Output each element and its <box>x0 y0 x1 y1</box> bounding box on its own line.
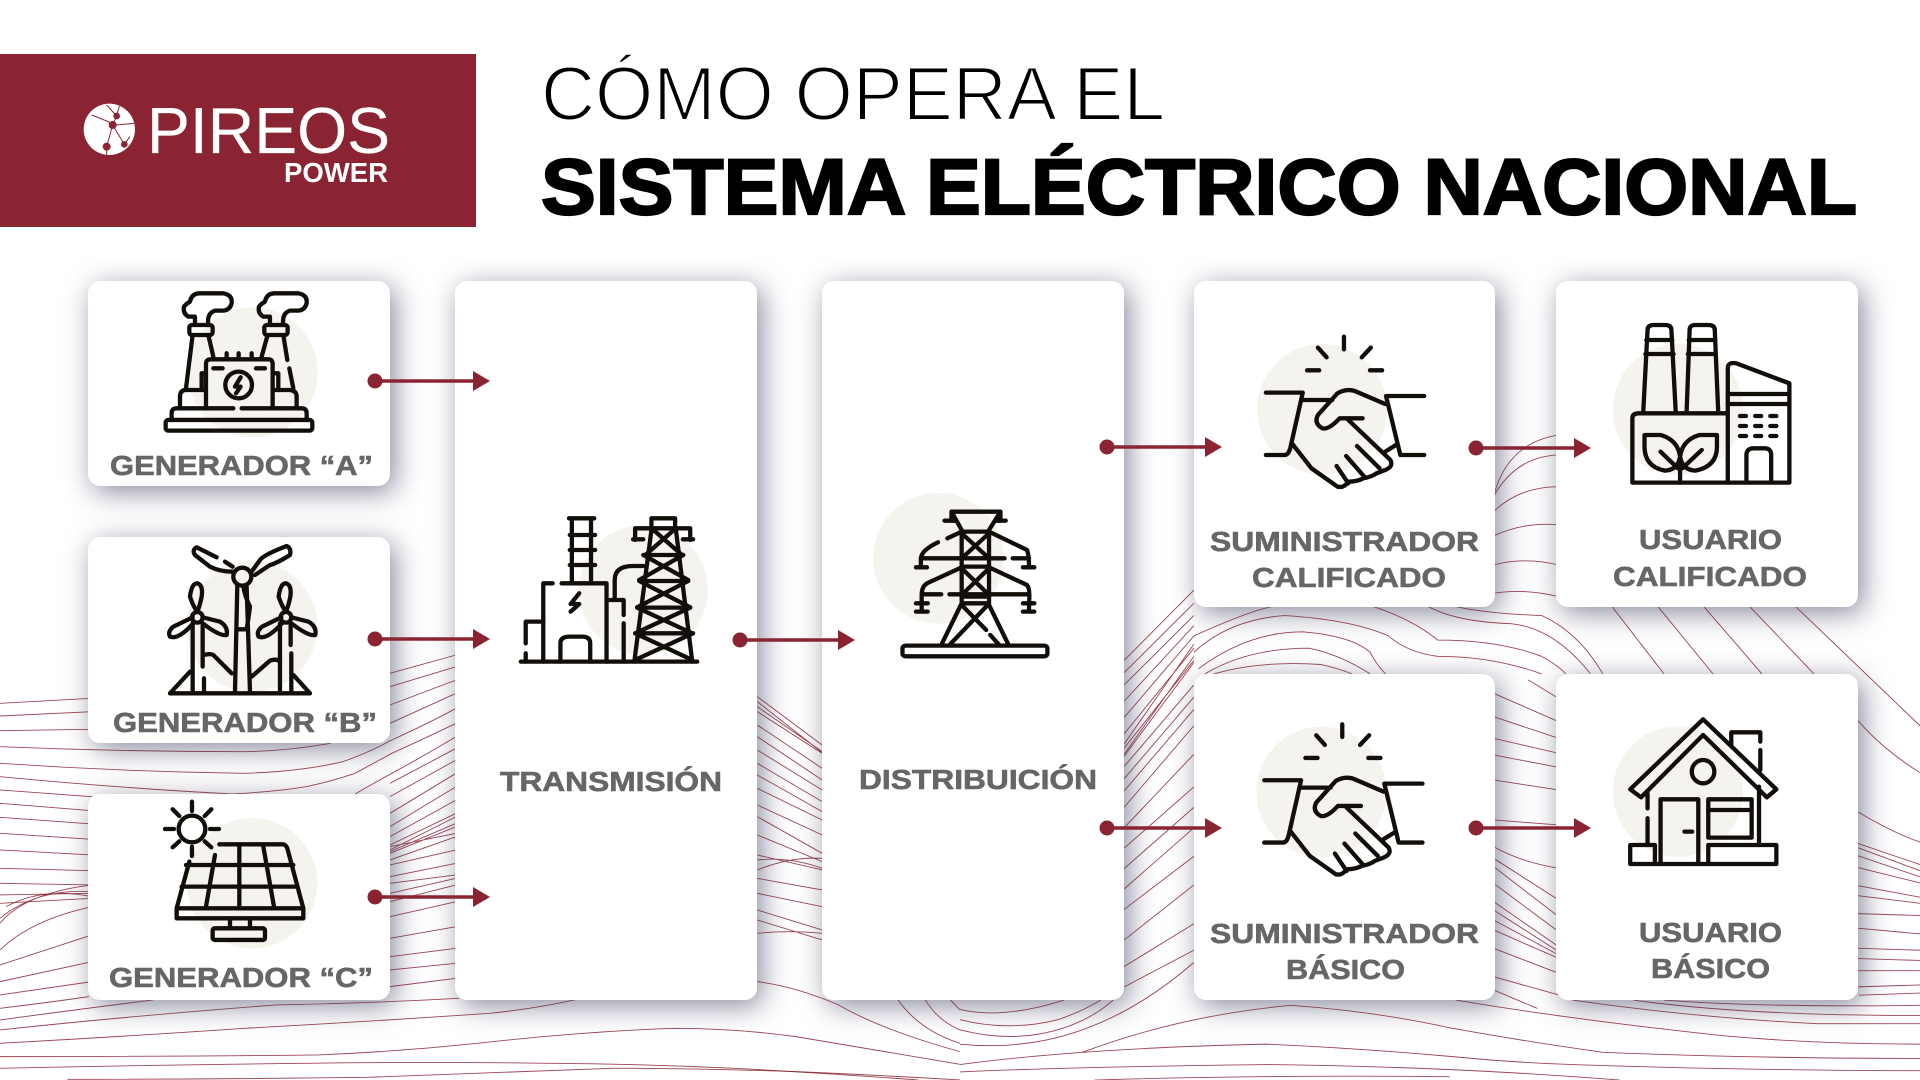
panel: generador A <box>88 281 390 486</box>
panel: suministrador calificado <box>1194 281 1495 607</box>
label: SUMINISTRADOR <box>1210 526 1479 557</box>
icon: wind turbines <box>169 546 317 693</box>
label: BÁSICO <box>1286 954 1405 985</box>
title <box>541 52 1857 231</box>
arrow: generador A to transmisión <box>368 371 490 391</box>
label: GENERADOR “B” <box>113 707 377 738</box>
icon: solar panel <box>165 802 317 949</box>
arrow: suministrador básico to usuario básico <box>1468 818 1591 838</box>
label: SUMINISTRADOR <box>1210 918 1479 949</box>
title line 2: SISTEMA ELÉCTRICO NACIONAL <box>541 142 1857 231</box>
logo subtitle: POWER <box>284 157 388 188</box>
label <box>1613 524 1807 592</box>
label <box>1210 918 1479 985</box>
panel: usuario calificado <box>1556 281 1858 607</box>
panel: usuario básico <box>1556 674 1858 1000</box>
panel: suministrador básico <box>1194 674 1495 1000</box>
icon: house <box>1613 719 1776 864</box>
arrow: transmisión to distribución <box>732 630 855 650</box>
label: DISTRIBUICIÓN <box>859 764 1097 795</box>
icon: pylon <box>873 493 1047 656</box>
label: USUARIO <box>1639 524 1782 555</box>
arrow: generador B to transmisión <box>368 629 490 649</box>
label <box>1210 526 1479 593</box>
arrow: distribución to suministrador básico <box>1100 818 1222 838</box>
arrow: distribución to suministrador calificado <box>1100 437 1222 457</box>
logo wordmark: PIREOS <box>147 94 390 167</box>
logo banner <box>0 54 476 227</box>
label: GENERADOR “C” <box>109 962 373 993</box>
panel: transmisión <box>455 281 757 1000</box>
icon: transmission plant and tower <box>521 518 708 662</box>
title line 1: CÓMO OPERA EL <box>541 52 1165 137</box>
arrow: suministrador calificado to usuario calificado <box>1468 438 1591 458</box>
label <box>1639 917 1782 984</box>
icon: green factory <box>1613 325 1789 483</box>
panel: generador B <box>88 537 390 743</box>
icon: handshake <box>1256 724 1422 875</box>
icon: handshake <box>1257 337 1424 487</box>
logo globe mark <box>84 104 135 155</box>
label: CALIFICADO <box>1252 562 1446 593</box>
panel: distribución <box>822 281 1124 1000</box>
panel: generador C <box>88 794 390 1000</box>
label: GENERADOR “A” <box>110 450 373 481</box>
icon: thermal power plant <box>166 293 318 437</box>
label: CALIFICADO <box>1613 561 1807 592</box>
label: USUARIO <box>1639 917 1782 948</box>
label: TRANSMISIÓN <box>500 766 722 797</box>
arrow: generador C to transmisión <box>368 887 490 907</box>
label: BÁSICO <box>1651 953 1770 984</box>
